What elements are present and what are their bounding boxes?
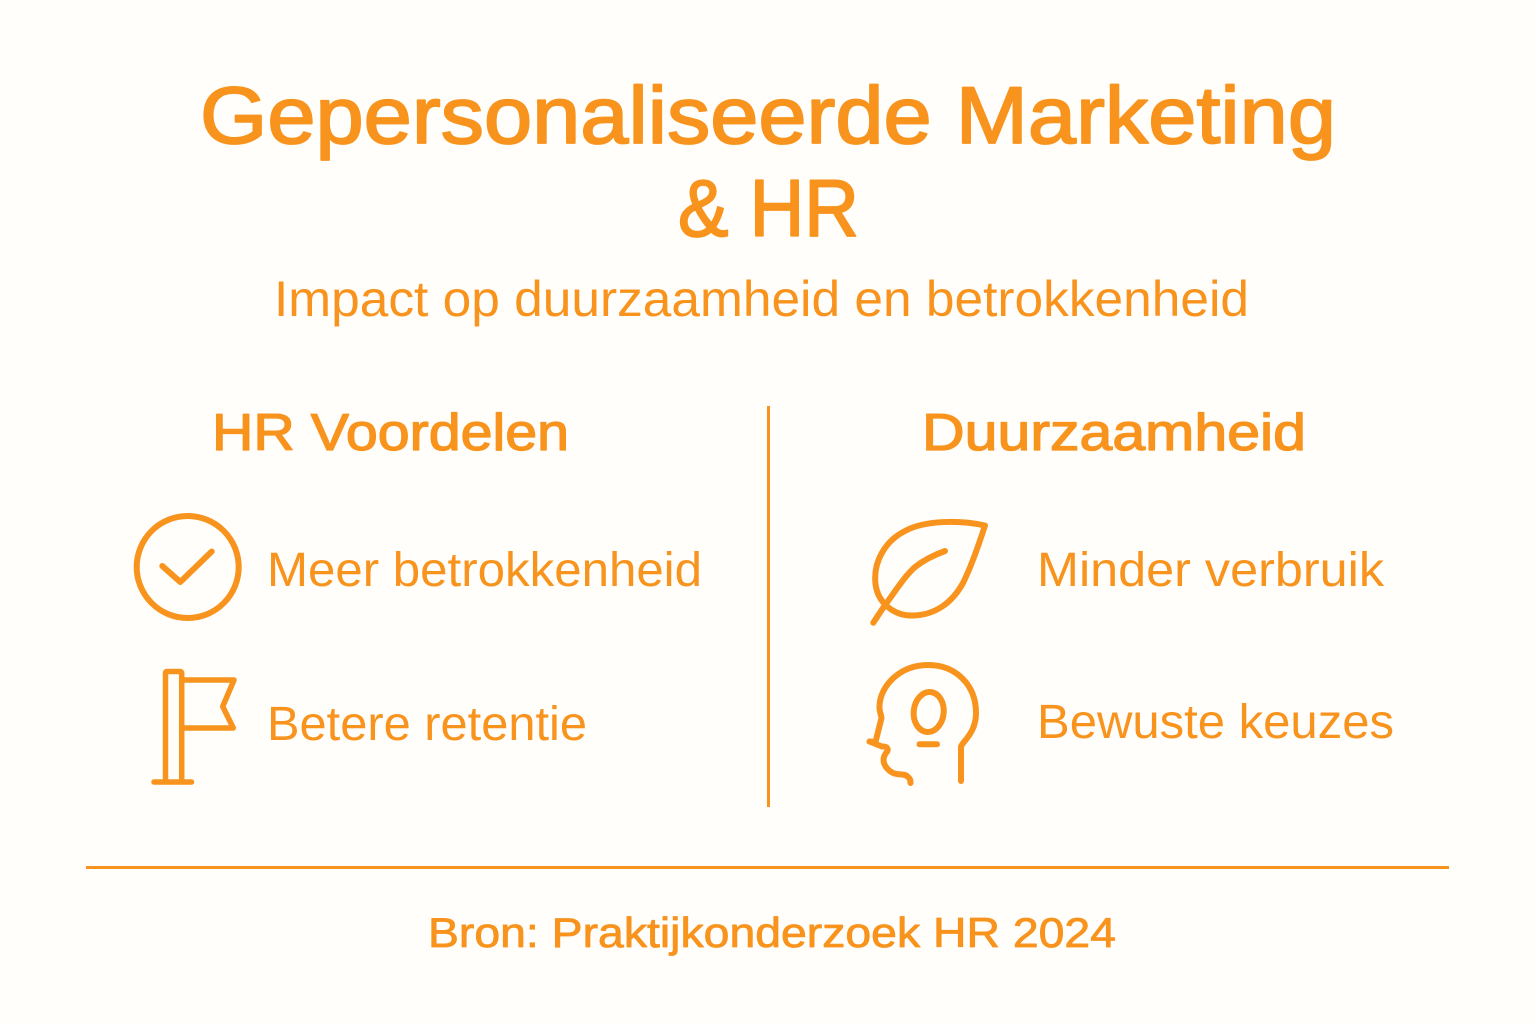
source note: Bron: Praktijkonderzoek HR 2024: [428, 909, 1116, 956]
text: Betere retentie: Betere retentie: [267, 698, 587, 751]
heading: HR Voordelen: HR Voordelen: [212, 404, 569, 462]
title: [200, 71, 1336, 254]
icon: leaf: [873, 522, 985, 623]
heading: Duurzaamheid: Duurzaamheid: [922, 404, 1306, 462]
divider: vertical: [767, 406, 770, 807]
panel: Duurzaamheid: [870, 404, 1394, 783]
text: Meer betrokkenheid: Meer betrokkenheid: [267, 544, 702, 597]
title: Gepersonaliseerde Marketing: [200, 71, 1336, 161]
panel: HR Voordelen: [137, 404, 702, 782]
text: Minder verbruik: Minder verbruik: [1037, 544, 1385, 597]
icon: flag: [154, 672, 234, 782]
icon: check circle: [137, 516, 239, 618]
icon: head with lightbulb: [870, 665, 976, 783]
text: Bewuste keuzes: Bewuste keuzes: [1037, 696, 1394, 749]
title: & HR: [678, 164, 859, 254]
divider: horizontal: [86, 866, 1449, 869]
subtitle: Impact op duurzaamheid en betrokkenheid: [274, 271, 1249, 327]
